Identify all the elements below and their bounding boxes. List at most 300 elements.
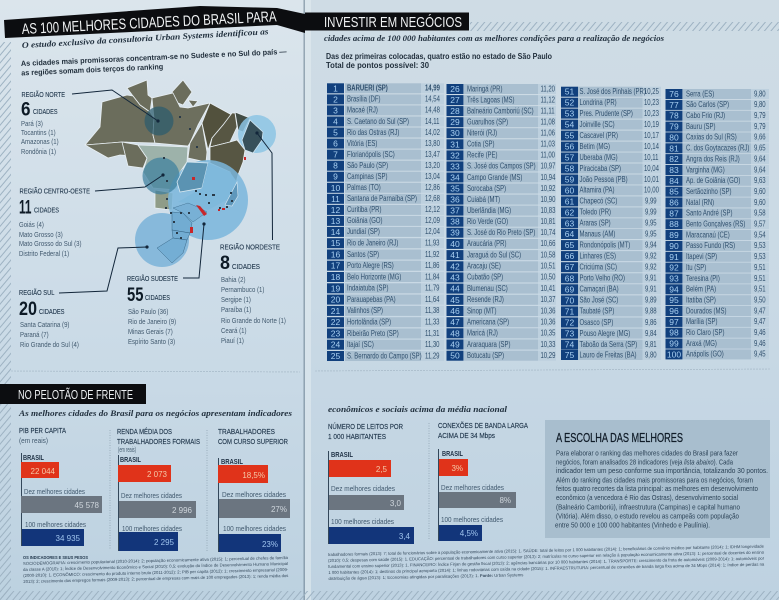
ranking table: positions 51 to 75: Toledo (PR) [580,208,611,217]
ranking table: positions 1 to 25: 14,48 [425,106,440,115]
ranking table: positions 1 to 25 [327,83,444,361]
leader lines [59,90,272,293]
chart: trabalhadores com curso superior: 100 melhores cidades [223,524,286,533]
panel: A escolha das melhores [545,420,770,538]
ranking table: positions 26 to 50: 42 [450,261,460,271]
region: Norte: REGIÃO NORTE [22,90,65,99]
ranking table: positions 51 to 75: João Pessoa (PB) [580,175,628,184]
ranking table: positions 51 to 75: 65 [565,240,574,250]
ranking table: positions 51 to 75: 74 [565,340,574,350]
ranking table: positions 26 to 50: Araucária (PR) [467,239,506,248]
ranking table: positions 26 to 50: 10,41 [541,284,555,293]
ranking table: positions 51 to 75: 9,95 [645,229,657,239]
ranking table: positions 1 to 25: 10 [331,183,340,193]
ranking table: positions 1 to 25: 14,54 [425,95,440,104]
ranking table: positions 1 to 25: 13,04 [425,172,440,181]
ranking table: positions 51 to 75: 75 [565,350,574,360]
region: Sul: REGIÃO SUL [19,288,54,297]
ranking table: positions 1 to 25: 12,86 [425,183,440,192]
ranking table: positions 26 to 50: 10,51 [541,262,555,271]
region: Sudeste: São Paulo (36) [128,309,168,316]
region: Nordeste: Ceará (1) [221,328,247,335]
ranking table: positions 76 to 100: 9,53 [754,252,766,261]
ranking table: positions 1 to 25: 11,38 [425,306,440,315]
ranking table: positions 51 to 75: 9,89 [645,296,657,305]
chart: renda média dos trabalhadores formais: Dez melhores cidades [121,491,182,500]
ranking table: positions 51 to 75: 55 [565,131,574,141]
ranking table: positions 51 to 75: Porto Velho (RO) [580,274,625,283]
chart: número de leitos: 2,5 [376,465,388,474]
ranking table: positions 1 to 25: 12 [331,205,340,215]
region: Norte: Amazonas (1) [21,139,59,146]
title left: black band: AS 100 MELHORES CIDADES DO BRASIL PARA [21,8,277,38]
ranking table: positions 26 to 50: Recife (PE) [467,151,498,160]
ranking table: positions 1 to 25: 24 [331,340,340,350]
ranking table: positions 76 to 100 [666,89,769,359]
ranking table: positions 26 to 50: 27 [450,95,460,105]
region: Centro-Oeste: Distrito Federal (1) [19,251,69,258]
ranking table: positions 76 to 100: 9,60 [754,198,766,207]
ranking table: positions 76 to 100: 9,54 [754,230,766,240]
ranking table: positions 76 to 100: 95 [669,295,679,305]
ranking table: positions 76 to 100: Rio Claro (SP) [686,328,724,337]
footnote: indicadores continuação [328,544,765,581]
region: Norte: Pará (3) [21,121,43,128]
ranking table: positions 1 to 25: 12,04 [425,227,440,236]
ranking table: positions 76 to 100: 9,51 [754,263,766,272]
ranking table: positions 51 to 75: 10,19 [644,120,659,129]
ranking table: positions 51 to 75: Manaus (AM) [580,229,615,239]
ranking table: positions 51 to 75: 54 [565,120,574,130]
ranking table: positions 51 to 75: Taboão da Serra (SP) [580,340,637,349]
region: Centro-Oeste [19,186,90,258]
ranking table: positions 51 to 75: 63 [565,218,574,228]
ranking table: positions 26 to 50: 10,97 [541,162,555,171]
ranking table: positions 51 to 75: Betim (MG) [580,142,610,151]
ranking table: positions 26 to 50: Três Lagoas (MS) [467,96,515,105]
chart: renda média dos trabalhadores formais: 2 073 [147,470,168,479]
ranking table: positions 51 to 75: 71 [565,306,574,316]
footnote: indicadores e pesos: SOCIODEMOGRAFIA: crescimento populacional (2010-2014): 2; população economicamente ativa (2015): 1; percentual de chefes de família [23,555,289,566]
region: Sudeste: Espírito Santo (3) [128,339,175,346]
ranking table: positions 51 to 75: Lauro de Freitas (BA) [580,350,637,360]
ranking table: positions 76 to 100: Anápolis (GO) [686,350,724,359]
ranking table: positions 51 to 75: 9,91 [645,274,657,283]
ranking table: positions 76 to 100: 100 [667,349,681,359]
ranking table: positions 1 to 25: 11,33 [425,318,440,327]
ranking table: positions 51 to 75: 69 [565,284,574,294]
chart: trabalhadores com curso superior: 18,5% [242,471,265,480]
ranking table: positions 51 to 75: 9,99 [645,208,657,217]
ranking table: positions 1 to 25: 20 [331,295,340,305]
footnote: indicadores continuação: distribuição de água (2013): 1; Economias atingidas por paralisações (2013): 1. Fonte: Urban Systems [328,572,523,581]
ranking table: positions 26 to 50: Cubatão (SP) [467,273,503,282]
ranking table: positions 51 to 75: 9,80 [645,350,657,360]
ranking table: positions 26 to 50: 29 [450,117,460,127]
ranking table: positions 1 to 25: 11,30 [425,340,440,349]
ranking table: positions 1 to 25: 6 [333,139,338,149]
ranking table: positions 1 to 25: Valinhos (SP) [347,306,383,315]
ranking table: positions 51 to 75: Taubaté (SP) [580,307,614,316]
region: Nordeste: Paraíba (1) [221,307,251,314]
heading: No pelotão de frente: NO PELOTÃO DE FRENTE [18,387,133,402]
title right: black band: INVESTIR EM NEGÓCIOS [324,14,462,31]
ranking table: positions 1 to 25: 11,79 [425,284,440,293]
ranking table: positions 26 to 50: 32 [450,150,460,160]
chart: PIB per capita: 34 935 [56,534,81,543]
ranking table: positions 1 to 25: 13 [331,216,340,226]
ranking table: positions 1 to 25: 11 [331,194,340,204]
chart: conexões de banda larga [438,421,529,541]
ranking table: positions 26 to 50: Sorocaba (SP) [467,184,506,193]
ranking table: positions 26 to 50: 10,35 [541,329,555,338]
subtitle right: cidades acima de 100 000 habitantes com as melhores condições para a realização de negócios [324,34,664,43]
ranking table: positions 26 to 50: Guarulhos (SP) [467,118,508,127]
ranking table: positions 51 to 75: 10,25 [644,87,659,96]
ranking table: positions 26 to 50: Campo Grande (MS) [467,173,522,182]
ranking table: positions 1 to 25: 18 [331,272,340,282]
footnote: indicadores continuação: 1 000 habitantes (2014): 1; destinos do principal aeroporto (2014): 1; linhas rodoviárias com saída na cidade (2015): 1. INFRAESTRUTURA: percentual de conexões de banda larga fixa acima de 34 Mbps (2014): 1; índice de perdas na [328,562,765,575]
region: Norte: Rondônia (1) [21,149,56,156]
intro text left: as regiões somam dois terços do ranking [21,62,164,77]
ranking table: positions 76 to 100: 76 [669,89,679,99]
ranking table: positions 51 to 75: Rondonópolis (MT) [580,241,630,250]
ranking table: positions 1 to 25: BARUERI (SP) [347,84,388,93]
ranking table: positions 26 to 50: Maricá (RJ) [467,329,498,338]
chart: número de leitos: 3,0 [390,499,402,508]
ranking table: positions 76 to 100: 88 [669,219,679,229]
ranking table: positions 76 to 100: 93 [669,274,679,284]
ranking table: positions 51 to 75: 10,17 [644,131,659,140]
ranking table: positions 26 to 50: 11,06 [541,129,555,138]
ranking table: positions 1 to 25: Goiânia (GO) [347,216,382,225]
ranking table: positions 1 to 25: Itajaí (SC) [347,340,374,349]
ranking table: positions 26 to 50: 10,36 [541,306,555,316]
ranking table: positions 51 to 75: Chapecó (SC) [580,197,617,206]
ranking table: positions 76 to 100: Caxias do Sul (RS) [686,133,737,142]
ranking table: positions 76 to 100: 9,64 [754,165,766,175]
ranking table: positions 1 to 25: 16 [331,250,340,260]
ranking table: positions 26 to 50: Americana (SP) [467,318,509,327]
region: Sudeste: REGIÃO SUDESTE [127,274,178,283]
ranking table: positions 76 to 100: Serra (ES) [686,89,714,99]
ranking table: positions 51 to 75: São José (SC) [580,296,618,305]
chart: PIB per capita: 100 melhores cidades [25,520,86,529]
ranking table: positions 76 to 100: 9,66 [754,133,766,142]
ranking table: positions 26 to 50 [446,84,556,361]
ranking table: positions 26 to 50: 10,50 [541,273,555,282]
panel: A escolha das melhores: negócios, foram analisados 28 indicadores (veja lista abaixo). Cada [556,458,733,466]
ranking table: positions 1 to 25: 11,84 [425,272,440,282]
ranking table: positions 51 to 75: Camaçari (BA) [580,285,619,294]
ranking table: positions 51 to 75: 10,14 [644,142,659,151]
ranking table: positions 51 to 75: Pres. Prudente (SP) [580,109,633,118]
ranking table: positions 76 to 100: Santo André (SP) [686,209,732,218]
ranking table: positions 26 to 50: 48 [450,328,460,338]
ranking table: positions 51 to 75: 9,81 [645,340,657,349]
ranking table: positions 51 to 75: Osasco (SP) [580,318,613,327]
ranking table: positions 1 to 25: Belo Horizonte (MG) [347,272,401,282]
ranking table: positions 51 to 75: 73 [565,329,574,339]
ranking table: positions 51 to 75: 9,95 [645,219,657,228]
ranking table: positions 26 to 50: 38 [450,217,460,227]
ranking table: positions 76 to 100: 77 [669,100,679,110]
region: Nordeste [220,242,286,345]
ranking table: positions 51 to 75: 10,11 [644,153,659,162]
ranking table: positions 26 to 50: 10,81 [541,217,555,226]
ranking table: positions 51 to 75: 64 [565,229,574,239]
ranking table: positions 51 to 75 [561,87,661,360]
ranking table: positions 76 to 100: 9,63 [754,176,766,185]
ranking table: positions 76 to 100: 92 [669,263,679,273]
ranking table: positions 1 to 25: 4 [333,116,338,126]
ranking table: positions 51 to 75: 60 [565,185,574,195]
ranking table: positions 51 to 75: 59 [565,174,574,184]
ranking table: positions 26 to 50: Blumenau (SC) [467,284,508,293]
ranking table: positions 1 to 25: Florianópolis (SC) [347,150,395,159]
ranking table: positions 26 to 50: 11,20 [541,84,555,94]
ranking table: positions 76 to 100: 9,50 [754,296,766,305]
ranking table: positions 76 to 100: 9,53 [754,241,766,250]
chart: trabalhadores com curso superior: COM CURSO SUPERIOR [218,437,288,446]
ranking table: positions 51 to 75: 10,00 [644,186,659,195]
region: Sul: Rio Grande do Sul (4) [20,342,79,349]
ranking table: positions 76 to 100: 9,60 [754,187,766,196]
region: Sul [19,288,79,349]
ranking table: positions 26 to 50: 33 [450,161,460,171]
chart: PIB per capita: 45 578 [75,501,100,510]
region: Nordeste: CIDADES [232,262,260,271]
ranking table: positions 76 to 100: 9,80 [754,89,766,99]
ranking table: positions 76 to 100: Passo Fundo (RS) [686,241,735,250]
ranking table: positions 1 to 25: 12,68 [425,194,440,203]
ranking table: positions 76 to 100: 89 [669,230,679,240]
ranking table: positions 26 to 50: 11,00 [541,151,555,160]
ranking table: positions 1 to 25: Parauapebas (PA) [347,295,396,304]
ranking table: positions 26 to 50: 39 [450,228,460,238]
ranking table: positions 1 to 25: Hortolândia (SP) [347,318,391,327]
ranking table: positions 26 to 50: Jaraguá do Sul (SC) [467,251,521,260]
chart: renda média dos trabalhadores formais: 100 melhores cidades [122,524,182,533]
ranking table: positions 26 to 50: Rio Verde (GO) [467,217,508,226]
ranking table: positions 26 to 50: S. José dos Campos (SP) [467,162,536,171]
ranking table: positions 76 to 100: 90 [669,241,679,251]
ranking table: positions 76 to 100: 9,64 [754,155,766,164]
ranking table: positions 1 to 25: 25 [331,351,340,361]
region: Sudeste: Rio de Janeiro (9) [128,319,176,326]
chart: PIB per capita [19,426,102,546]
ranking table: positions 76 to 100: 99 [669,339,679,349]
ranking table: positions 51 to 75: Araras (SP) [580,219,611,228]
chart: número de leitos: NÚMERO DE LEITOS POR [328,422,403,431]
ranking table: positions 76 to 100: Maracanaú (CE) [686,230,730,240]
ranking table: positions 26 to 50: 11,12 [541,96,555,105]
ranking table: positions 26 to 50: 41 [450,250,460,260]
ranking table: positions 1 to 25: 14,99 [425,84,440,93]
ranking table: positions 26 to 50: 31 [450,139,460,149]
ranking table: positions 1 to 25: São Paulo (SP) [347,161,388,170]
panel: A escolha das melhores: (Vitória). Além disso, o estudo revelou as campeãs com população [556,512,739,520]
region: Centro-Oeste: Mato Grosso do Sul (3) [19,241,82,248]
ranking table: positions 1 to 25: 14 [331,227,340,237]
ranking table: positions 26 to 50: 47 [450,317,460,327]
ranking table: positions 26 to 50: 44 [450,284,460,294]
footnote: indicadores e pesos: da classe A (2010): 1; Índice de Desenvolvimento Econômico e Social (2010): 0,5; evolução do Índice de Desenvolvimento Humano Municipal [23,561,288,572]
ranking table: positions 51 to 75: Altamira (PA) [580,186,615,195]
ranking table: positions 51 to 75: 9,86 [645,318,657,327]
ranking table: positions 76 to 100: 9,45 [754,350,766,359]
ranking table: positions 76 to 100: Araxá (MG) [686,339,717,348]
ranking table: positions 26 to 50: 46 [450,306,460,316]
region: Norte: 6 [21,100,30,120]
ranking table: positions 76 to 100: Angra dos Reis (RJ) [686,155,740,164]
chart: trabalhadores com curso superior [218,427,290,552]
ranking table: positions 76 to 100: 9,58 [754,209,766,218]
ranking table: positions 26 to 50: 49 [450,340,460,350]
ranking table: positions 76 to 100: Sertãozinho (SP) [686,187,731,196]
ranking table: positions 51 to 75: Londrina (PR) [580,98,617,107]
ranking table: positions 1 to 25: 2 [333,94,338,104]
ranking table: positions 1 to 25: Rio de Janeiro (RJ) [347,239,398,248]
ranking table: positions 76 to 100: 9,65 [754,144,766,153]
chart: renda média dos trabalhadores formais: BRASIL [120,455,141,464]
region: Sudeste: Minas Gerais (7) [128,329,173,336]
ranking table: positions 51 to 75: 10,23 [644,109,659,118]
region: Norte: CIDADES [33,107,58,116]
ranking table: positions 1 to 25: 14,02 [425,128,440,137]
ranking table: positions 76 to 100: Cabo Frio (RJ) [686,111,725,120]
region: Centro-Oeste: REGIÃO CENTRO-OESTE [20,186,90,196]
region: Nordeste: Sergipe (1) [221,297,251,304]
region: Sul: Santa Catarina (9) [20,322,69,329]
region: Centro-Oeste: Mato Grosso (3) [19,232,63,239]
region: Nordeste: Piauí (1) [221,338,244,345]
ranking table: positions 1 to 25: 11,64 [425,295,440,304]
ranking table: positions 76 to 100: 96 [669,306,679,316]
ranking table: positions 26 to 50: Sinop (MT) [467,306,497,316]
ranking table: positions 51 to 75: Uberaba (MG) [580,153,618,162]
intro text left [21,47,288,77]
ranking table: positions 51 to 75: S. José dos Pinhais (PR) [580,87,646,96]
ranking table: positions 76 to 100: 91 [669,252,679,262]
chart: PIB per capita: Dez melhores cidades [24,487,85,496]
ranking table: positions 76 to 100: 82 [669,154,679,164]
ranking table: positions 51 to 75: 9,92 [645,263,657,272]
ranking table: positions 26 to 50: 11,08 [541,118,555,127]
ranking table: positions 26 to 50: 35 [450,184,460,194]
ranking table: positions 76 to 100: Itu (SP) [686,263,706,272]
ranking table: positions 76 to 100: Bauru (SP) [686,122,716,131]
footnote: indicadores e pesos: OS INDICADORES E SEUS PESOS [23,555,88,560]
heading: No pelotão de frente [0,384,146,404]
footnote: indicadores continuação: (2010): 0,5; despesas com saúde (2015): 1. EDUCAÇÃO: percentual de trabalhadores com curso superior (2013): 2; matrículas no curso superior em relação à população economicamente ativa (2013): 1; percentual de docentes do ensino [328,550,765,563]
ranking table: positions 51 to 75: 9,94 [645,241,657,250]
chart: renda média dos trabalhadores formais: 2 295 [154,538,175,547]
chart: renda média dos trabalhadores formais: RENDA MÉDIA DOS [117,427,172,436]
ranking table: positions 51 to 75: 56 [565,142,574,152]
ranking table: positions 51 to 75: Piracicaba (SP) [580,164,621,173]
ranking table: positions 26 to 50: 45 [450,295,460,305]
ranking table: positions 1 to 25: 14,11 [425,117,440,126]
chart: número de leitos: 3,4 [399,532,411,541]
ranking table: positions 51 to 75: 9,92 [645,252,657,261]
ranking table: positions 1 to 25: Ribeirão Preto (SP) [347,329,399,338]
chart: trabalhadores com curso superior: TRABALHADORES [218,427,275,436]
subtitle left: O estudo exclusivo da consultoria Urban Systems identificou as [22,27,269,50]
ranking table: positions 26 to 50: Niterói (RJ) [467,129,497,138]
ranking table: positions 26 to 50: Cotia (SP) [467,140,495,149]
ranking table: positions 76 to 100: 83 [669,165,679,175]
ranking table: positions 1 to 25: 19 [331,283,340,293]
ranking table: positions 1 to 25: S. Caetano do Sul (SP) [347,117,409,126]
ranking table: positions 76 to 100: 9,46 [754,339,766,348]
ranking table: positions 76 to 100: Natal (RN) [686,198,714,207]
chart: renda média dos trabalhadores formais: 2 996 [172,506,193,515]
ranking table: positions 26 to 50: 26 [450,84,460,94]
ranking table: positions 76 to 100: 81 [669,143,679,153]
ranking table: positions 26 to 50: 50 [450,351,460,361]
ranking table: positions 26 to 50: 36 [450,195,460,205]
panel: A escolha das melhores: Além do ranking das cidades mais promissoras para os negócios, foram [556,476,753,484]
ranking table: positions 51 to 75: 66 [565,251,574,261]
ranking table: positions 1 to 25: 11,31 [425,329,440,338]
chart: PIB per capita: 22 044 [31,467,56,476]
region: Norte: Tocantins (1) [21,130,56,137]
ranking table: positions 1 to 25: 13,47 [425,150,440,159]
ranking table: positions 51 to 75: 51 [565,87,574,97]
ranking table: positions 1 to 25: 21 [331,306,340,316]
ranking table: positions 26 to 50: 30 [450,128,460,138]
chart: trabalhadores com curso superior: Dez melhores cidades [222,490,286,499]
chart: PIB per capita: BRASIL [23,453,44,462]
ranking table: positions 51 to 75: Cascavel (PR) [580,131,618,140]
ranking table: positions 1 to 25: 9 [333,172,338,182]
ranking table: positions 26 to 50: Cuiabá (MT) [467,195,500,204]
chart: conexões de banda larga: 100 melhores cidades [441,515,503,524]
ranking table: positions 26 to 50: 10,83 [541,206,555,215]
ranking table: positions 26 to 50: 10,74 [541,228,555,237]
ranking table: positions 1 to 25: 13,20 [425,161,440,170]
ranking table: positions 51 to 75: Linhares (ES) [580,252,616,261]
chart: renda média dos trabalhadores formais: (em reais) [118,445,136,454]
ranking table: positions 76 to 100: Itatiba (SP) [686,296,716,305]
ranking table: positions 51 to 75: 9,88 [645,307,657,316]
ranking table: positions 51 to 75: 10,01 [644,175,659,184]
chart: conexões de banda larga: Dez melhores cidades [441,483,504,492]
ranking table: positions 26 to 50: Maringá (PR) [467,84,502,94]
ranking table: positions 1 to 25: Santos (SP) [347,250,379,259]
chart: PIB per capita: (em reais) [19,436,48,445]
region: Nordeste: Bahia (2) [221,277,246,284]
ranking table: positions 51 to 75: Pouso Alegre (MG) [580,329,630,338]
ranking table: positions 76 to 100: Dourados (MS) [686,306,726,316]
ranking table: positions 1 to 25: 17 [331,261,340,271]
footnote: indicadores continuação: fundamental com ensino superior (2013): 1. FINANCEIRO: Índice Firjan de gestão fiscal (2013): 2; agências bancárias por 10 000 habitantes (2014): 1. TRANSPORTE: crescimento da frota de automóveis (2009-2014): 1; automóveis por [328,556,765,569]
ranking table: positions 26 to 50: Balneário Camboriú (SC) [467,107,534,116]
ranking table: positions 26 to 50: 28 [450,106,460,116]
ranking table: positions 51 to 75: 53 [565,109,574,119]
ranking table: positions 26 to 50: Uberlândia (MG) [467,206,511,215]
ranking table: positions 51 to 75: 10,04 [644,164,659,173]
ranking table: positions 1 to 25: 11,86 [425,261,440,270]
ranking table: positions 51 to 75: 67 [565,262,574,272]
panel: A escolha das melhores: entre 50 000 e 100 000 habitantes (Vinhedo e Paulínia). [555,520,710,530]
panel: A escolha das melhores: (Balneário Camboriú), infraestrutura (Campinas) e capital humano [556,502,740,512]
city markers [163,116,233,239]
ranking table: positions 76 to 100: 79 [669,122,679,132]
ranking table: positions 1 to 25: Campinas (SP) [347,172,387,181]
ranking table: positions 76 to 100: 9,57 [754,220,766,229]
